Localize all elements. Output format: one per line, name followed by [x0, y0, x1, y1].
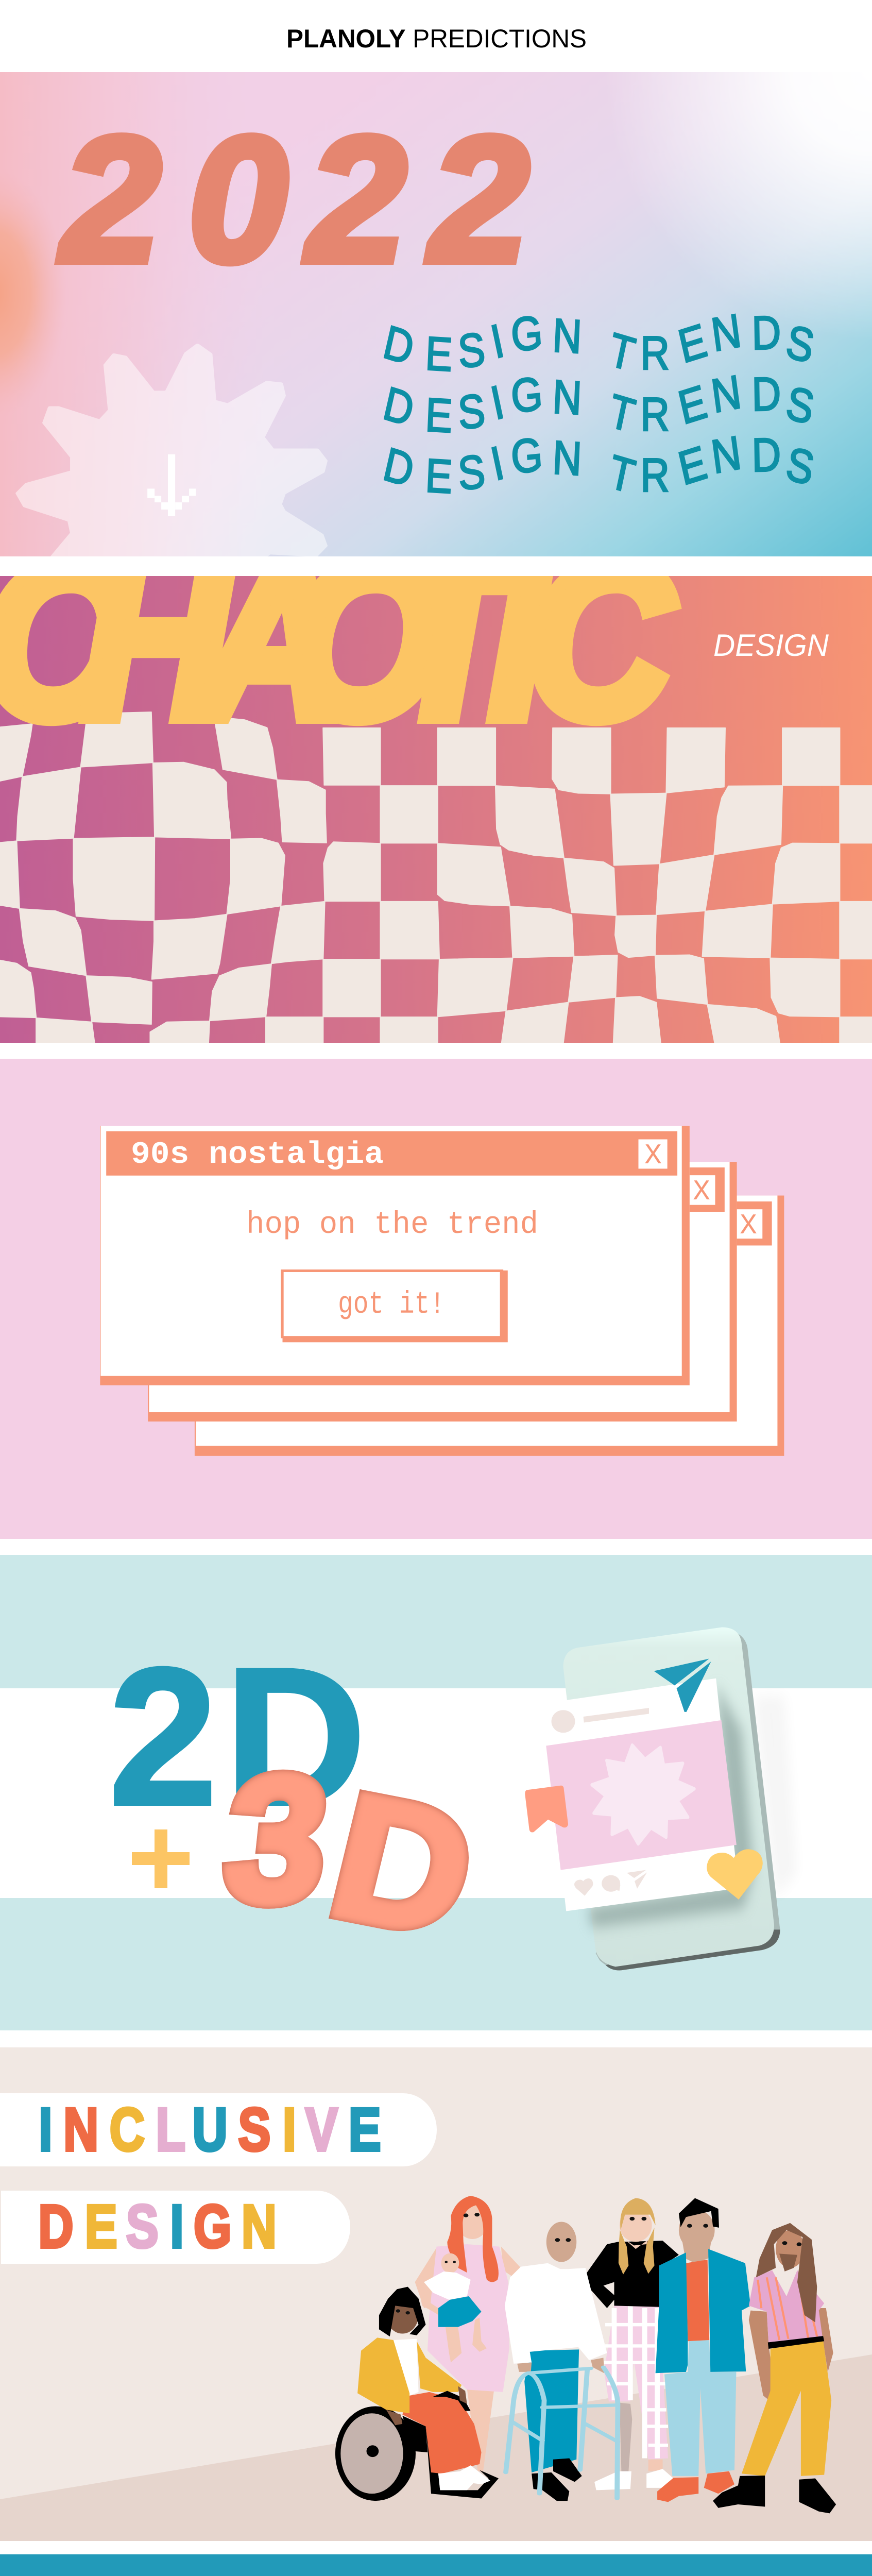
close icon: middle window: X — [693, 1175, 710, 1208]
person: woman with blonde braids — [582, 2198, 679, 2490]
heading: DESIGN: S — [126, 2192, 159, 2260]
heading: 3D: 3 — [216, 1738, 337, 1940]
panel 6 background — [0, 2554, 872, 2576]
panel: 90s nostalgia — [0, 1059, 872, 1539]
heading: INCLUSIVE: I — [283, 2095, 296, 2163]
heading: CHAOTIC: CHAOTIC — [0, 515, 674, 765]
floor — [0, 2354, 872, 2541]
window title: 90s nostalgia — [131, 1138, 384, 1173]
heading: INCLUSIVE: E — [349, 2095, 381, 2163]
icon: plus sign — [132, 1829, 190, 1888]
phone illustration — [525, 1627, 797, 1970]
phone back edge — [596, 1632, 780, 1970]
pill: inclusive — [0, 2093, 437, 2166]
panel: 2022 design trends — [0, 72, 872, 556]
heading: INCLUSIVE: U — [193, 2095, 228, 2163]
panel: experimental type — [0, 2554, 872, 2576]
heading: INCLUSIVE: L — [156, 2095, 185, 2163]
person: woman in wheelchair — [335, 2287, 499, 2501]
heading: 3D — [216, 1738, 491, 1974]
label: DESIGN: DESIGN — [713, 628, 829, 663]
button label: got it! — [338, 1287, 445, 1323]
panel 3 background — [0, 1059, 872, 1539]
icon: pixel down arrow — [147, 454, 196, 516]
heading: design trends repeated — [383, 313, 814, 494]
heading: 2D: 2D — [109, 1627, 366, 1846]
warped checkerboard — [0, 712, 872, 1043]
heading: INCLUSIVE: I — [39, 2095, 52, 2163]
person: man in blue jacket — [656, 2198, 750, 2502]
heading: INCLUSIVE: V — [305, 2095, 338, 2163]
post card — [542, 1679, 739, 1911]
heading: INCLUSIVE: N — [63, 2095, 98, 2163]
heading: DESIGN: D — [38, 2192, 74, 2260]
person: woman in pink dress with baby — [415, 2196, 521, 2471]
panel: inclusive design — [0, 2047, 872, 2541]
phone front — [563, 1627, 774, 1967]
panel 5 background — [0, 2047, 872, 2541]
soft shadow — [754, 1696, 797, 1899]
panel 1 gradient background — [0, 72, 872, 556]
starburst — [592, 1745, 694, 1844]
person: long-haired bearded person — [713, 2223, 836, 2513]
heading: 3D: D — [315, 1756, 491, 1974]
front window — [100, 1126, 690, 1385]
heading: 2022: 2022 — [59, 100, 529, 299]
avatar — [552, 1710, 575, 1733]
username bar — [584, 1708, 649, 1723]
icon: yellow heart — [707, 1849, 763, 1900]
heading: DESIGN: N — [242, 2192, 277, 2260]
heading: DESIGN: G — [194, 2192, 231, 2260]
panel: chaotic design — [0, 576, 872, 1043]
heading: DESIGN: I — [170, 2192, 184, 2260]
icon: bookmark — [525, 1786, 568, 1833]
pill: design — [1, 2191, 350, 2264]
person: man with walker — [505, 2222, 618, 2501]
post action icons — [574, 1870, 647, 1896]
panel 2 gradient background — [0, 576, 872, 1043]
heading: INCLUSIVE: S — [238, 2095, 270, 2163]
close icon: back window: X — [740, 1209, 757, 1242]
starburst shape — [18, 345, 326, 558]
window message: hop on the trend — [246, 1208, 538, 1243]
illustration: group of people — [335, 2196, 836, 2513]
icon: paper plane — [654, 1659, 711, 1712]
middle window — [148, 1162, 737, 1421]
panel 4 striped background — [0, 1555, 872, 2030]
panel: 2D + 3D — [0, 1555, 872, 2030]
back window — [195, 1196, 784, 1456]
heading: INCLUSIVE: C — [110, 2095, 145, 2163]
post image — [546, 1720, 737, 1870]
header title: PLANOLY PREDICTIONS — [286, 24, 587, 53]
button — [281, 1269, 508, 1342]
facial features — [396, 2213, 801, 2314]
close icon: front window: X — [644, 1139, 662, 1172]
heading: DESIGN: E — [85, 2192, 117, 2260]
card shadow — [588, 1684, 754, 1927]
